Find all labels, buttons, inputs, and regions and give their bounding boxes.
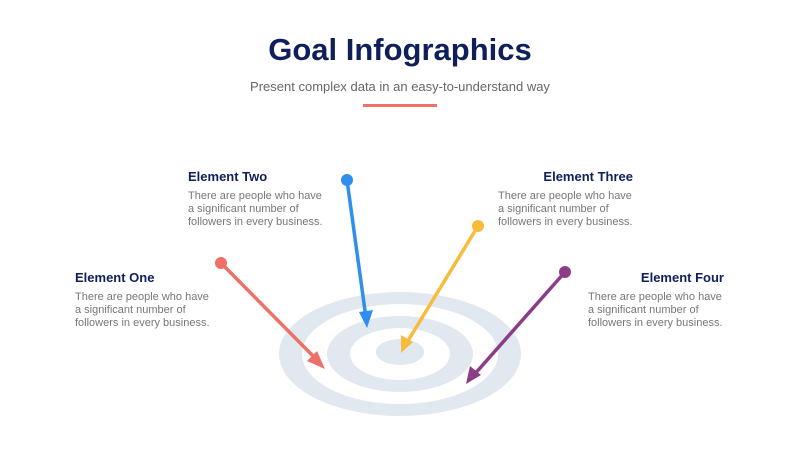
arrow: blue	[341, 174, 373, 328]
element four text: There are people who have	[588, 291, 722, 303]
element four text	[588, 291, 723, 329]
element three text: a significant number of	[498, 203, 609, 215]
element three text: There are people who have	[498, 190, 632, 202]
arrow: purple	[466, 266, 571, 384]
element three heading: Element Three	[543, 169, 633, 184]
element three text	[498, 190, 633, 228]
title: Goal Infographics	[268, 32, 532, 67]
element four heading: Element Four	[641, 270, 724, 285]
title underline	[363, 104, 437, 107]
arrow: red	[215, 257, 325, 369]
element one text: a significant number of	[75, 304, 186, 316]
element four text: followers in every business.	[588, 317, 723, 329]
element one heading: Element One	[75, 270, 154, 285]
element four text: a significant number of	[588, 304, 699, 316]
element one text: There are people who have	[75, 291, 209, 303]
subtitle: Present complex data in an easy-to-understand way	[250, 79, 550, 94]
element three text: followers in every business.	[498, 216, 633, 228]
element one text: followers in every business.	[75, 317, 210, 329]
arrow: yellow	[401, 220, 484, 353]
element two text	[188, 190, 323, 228]
element two text: followers in every business.	[188, 216, 323, 228]
element two heading: Element Two	[188, 169, 267, 184]
element two text: a significant number of	[188, 203, 299, 215]
target	[279, 292, 521, 416]
element one text	[75, 291, 210, 329]
element two text: There are people who have	[188, 190, 322, 202]
